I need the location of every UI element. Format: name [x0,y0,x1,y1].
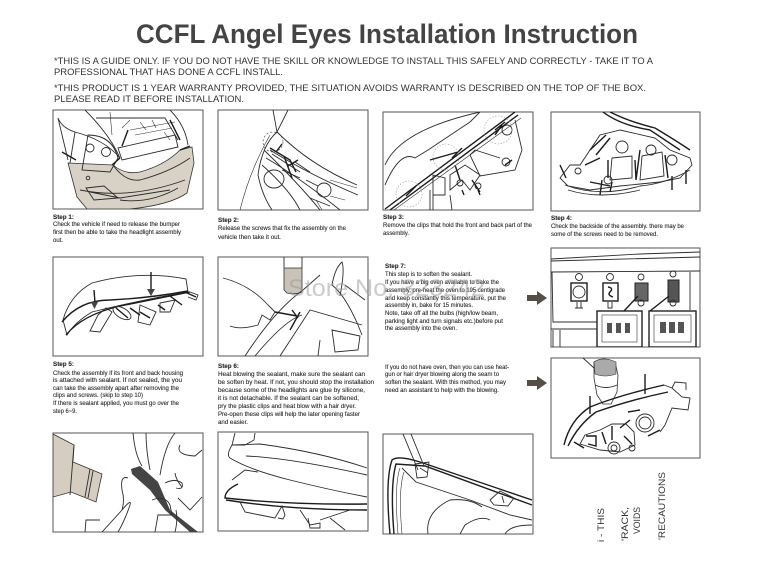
panel: step 2 illustration, screws [218,110,368,210]
step 5 text: is attached with sealant. If not sealed, the you [53,377,182,384]
step 7 text: parking light and turn signals etc.)before put [385,318,503,325]
warning notes: PROFESSIONAL THAT HAS DONE A CCFL INSTALL. [54,67,283,78]
step 7 text: the assembly into the oven. [385,325,457,332]
step 7 text: Step 7: [385,263,406,270]
step 6 text: it is not detachable. If the sealant can be softened, [218,395,359,402]
warning notes: PLEASE READ IT BEFORE INSTALLATION. [54,94,244,105]
step 4 text [551,215,684,238]
step 5 text: clips and screws. (skip to step 10) [53,392,143,399]
step 7 text [385,263,506,332]
step 1 text: first then be able to take the headlight assembly [53,229,182,236]
warning notes: *THIS PRODUCT IS 1 YEAR WARRANTY PROVIDED, THE SITUATION AVOIDS WARRANTY IS DESCRIBED ON THE TOP OF THE BOX. [54,83,646,94]
step 3 text: assembly. [383,230,409,237]
step 6 text: Pre-open these clips will help the later opening faster [218,411,361,418]
step 6 text: and easier. [218,419,248,426]
step 1 text: Check the vehicle if need to release the bumper [53,221,181,228]
step 5 text: can take the assembly apart after removing the [53,385,179,392]
step 1 text [53,214,182,244]
step 2 text: Release the screws that fix the assembly on the [218,225,346,232]
panel: step 1 illustration, bumper removal [53,110,203,209]
step 6 text: Heat blowing the sealant, make sure the sealant can [218,371,365,378]
panel: step 5 illustration, headlight with arrows [53,257,203,356]
step 5 text: If there is sealant applied, you must go over the [53,400,179,407]
panel: step 7 illustration, oven [551,248,700,347]
step 1 text: Step 1: [53,214,74,221]
step 5 text: Step 5: [53,361,74,368]
warning notes [54,56,654,105]
step 1 text: out. [53,237,63,244]
panel: sealant softening illustration [53,433,203,532]
step 4 text: some of the screws need to be removed. [551,231,658,238]
rotated cut-off text: this: i - THIS [596,508,607,542]
step 4 text: Check the backside of the assembly. there may be [551,223,684,230]
panel: clip removal illustration [383,434,533,534]
step 2 text: vehicle then take it out. [218,234,281,241]
step 7 text: Note, take off all the bulbs (high/low beam, [385,310,498,317]
no oven alternative text: If you do not have oven, then you can use heat- [385,364,509,371]
step 3 text [383,214,532,237]
step 3 text: Step 3: [383,214,404,221]
panel: step 4 illustration, back of assembly [551,112,700,211]
panel: step 3 illustration, clips [383,112,533,210]
step 7 text: assembly, pre-heat the oven to 195 centigrade [385,287,505,294]
rotated cut-off text: precautions: 'RECAUTIONS [657,472,668,540]
step 4 text: Step 4: [551,215,572,222]
warning notes: *THIS IS A GUIDE ONLY. IF YOU DO NOT HAVE THE SKILL OR KNOWLEDGE TO INSTALL THIS SAFELY AND CORRECTLY - TAKE IT TO A [54,56,654,67]
step 6 text: Step 6: [218,363,239,370]
no oven alternative text: gun or hair dryer blowing along the seam to [385,371,499,378]
icon: oven settings boxes [597,311,696,347]
title: CCFL Angel Eyes Installation Instruction [136,19,638,49]
step 5 text [53,361,183,415]
icon: lamps in oven [571,271,679,308]
step 7 text: This step is to soften the sealant. [385,271,472,278]
step 2 text [218,217,346,241]
step 3 text: Remove the clips that hold the front and back part of the [383,222,532,229]
rotated cut-off text: voids: VOIDS [632,507,643,534]
arrow: to oven panel [527,291,547,305]
step 6 text: pry the plastic clips and heat blow with a hair dryer. [218,403,356,410]
panel: step 6 illustration, heat gun and clip [218,257,368,356]
step 7 text: assembly in, bake for 15 minutes. [385,302,473,309]
watermark: Store No: 323242 [288,275,485,302]
arrow: to heat gun panel [527,376,547,390]
step 7 text: and keep constantly this temperature, put the [385,295,506,302]
rotated cut-off text: crack: 'RACK, [620,507,631,541]
panel: lens separation illustration [218,432,368,531]
panel: heat gun illustration [551,358,700,458]
step 6 text [218,363,374,426]
step 6 text: because some of the headlights are glue by silicone, [218,387,365,394]
step 5 text: Check the assembly if its front and back housing [53,370,183,377]
no oven alternative text: need an assistant to help with the blowing. [385,387,499,394]
step 2 text: Step 2: [218,217,239,224]
step 7 text: If you have a big oven available to bake the [385,279,499,286]
no oven alternative text [385,364,509,394]
step 6 text: be soften by heat. If not, you should stop the installation [218,379,374,386]
no oven alternative text: soften the sealant. With this method, you may [385,379,507,386]
step 5 text: step 6~9. [53,408,77,415]
